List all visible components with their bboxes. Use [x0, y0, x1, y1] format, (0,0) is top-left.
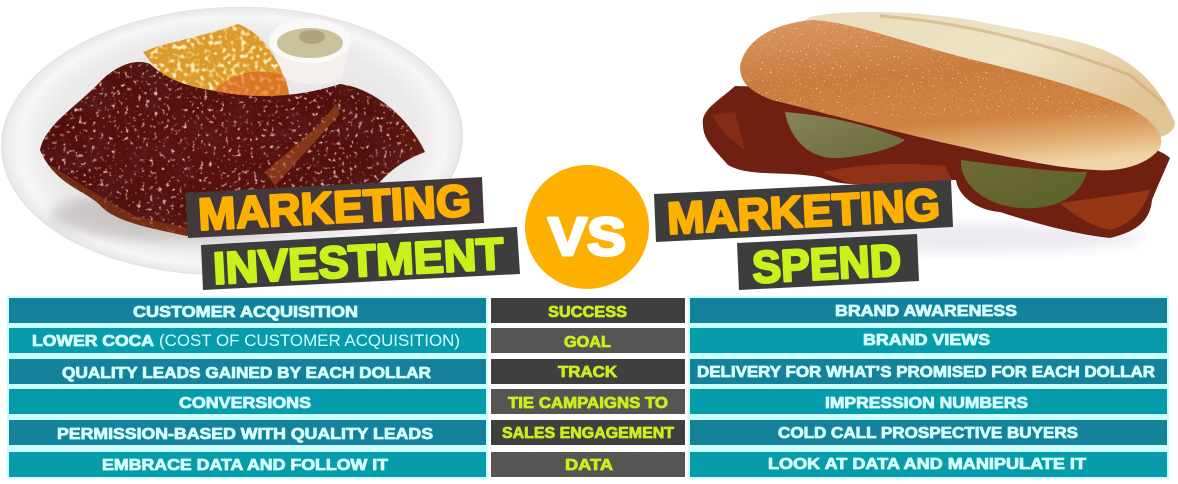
panel: investment column: CONVERSIONS: [179, 395, 311, 412]
panel: spend column: BRAND VIEWS: [863, 332, 990, 349]
panel: criteria column: TRACK: [558, 364, 618, 381]
photo: rib sandwich: [703, 12, 1175, 252]
panel: investment column: EMBRACE DATA AND FOLLOW IT: [102, 457, 389, 474]
heading: marketing investment: INVESTMENT: [212, 228, 505, 294]
panel: criteria column: DATA: [565, 457, 613, 474]
heading: marketing spend: MARKETING: [666, 179, 941, 244]
panel: criteria column: GOAL: [564, 334, 611, 351]
badge: vs: VS: [548, 207, 626, 267]
panel: spend column: IMPRESSION NUMBERS: [825, 395, 1028, 412]
heading: marketing investment: MARKETING: [197, 175, 472, 240]
icon: pickle left: [785, 112, 905, 158]
panel: criteria column: TIE CAMPAIGNS TO: [508, 395, 668, 412]
icon: back of bun: [790, 12, 1175, 137]
photo: plate of ribs: [0, 0, 468, 283]
panel: spend column: BRAND AWARENESS: [835, 303, 1017, 320]
panel: spend column: LOOK AT DATA AND MANIPULATE IT: [768, 456, 1087, 473]
row text: lower coca: LOWER COCA: [32, 333, 154, 350]
heading: marketing spend: [654, 179, 953, 293]
panel: investment column: [7, 296, 488, 479]
icon: ribs: [35, 55, 430, 240]
panel: spend column: COLD CALL PROSPECTIVE BUYERS: [778, 425, 1078, 442]
badge: vs: [525, 165, 649, 289]
icon: meat: [703, 86, 1170, 238]
icon: front of bun: [740, 18, 1165, 170]
icon: pickle right: [961, 160, 1087, 208]
panel: criteria column: [491, 298, 685, 477]
panel: spend column: DELIVERY FOR WHAT’S PROMISED FOR EACH DOLLAR: [697, 364, 1155, 381]
panel: investment column: QUALITY LEADS GAINED BY EACH DOLLAR: [62, 365, 431, 382]
panel: investment column: CUSTOMER ACQUISITION: [133, 304, 358, 321]
panel: criteria column: SUCCESS: [548, 304, 627, 321]
panel: investment column: PERMISSION-BASED WITH QUALITY LEADS: [57, 426, 433, 443]
panel: criteria column: SALES ENGAGEMENT: [502, 425, 675, 442]
icon: rice: [143, 24, 290, 96]
icon: sauce cup: [269, 19, 351, 85]
heading: marketing spend: SPEND: [751, 234, 902, 293]
heading: marketing investment: [185, 175, 520, 294]
row text: lower coca: (COST OF CUSTOMER ACQUISITION): [159, 331, 460, 350]
panel: spend column: [688, 296, 1169, 479]
